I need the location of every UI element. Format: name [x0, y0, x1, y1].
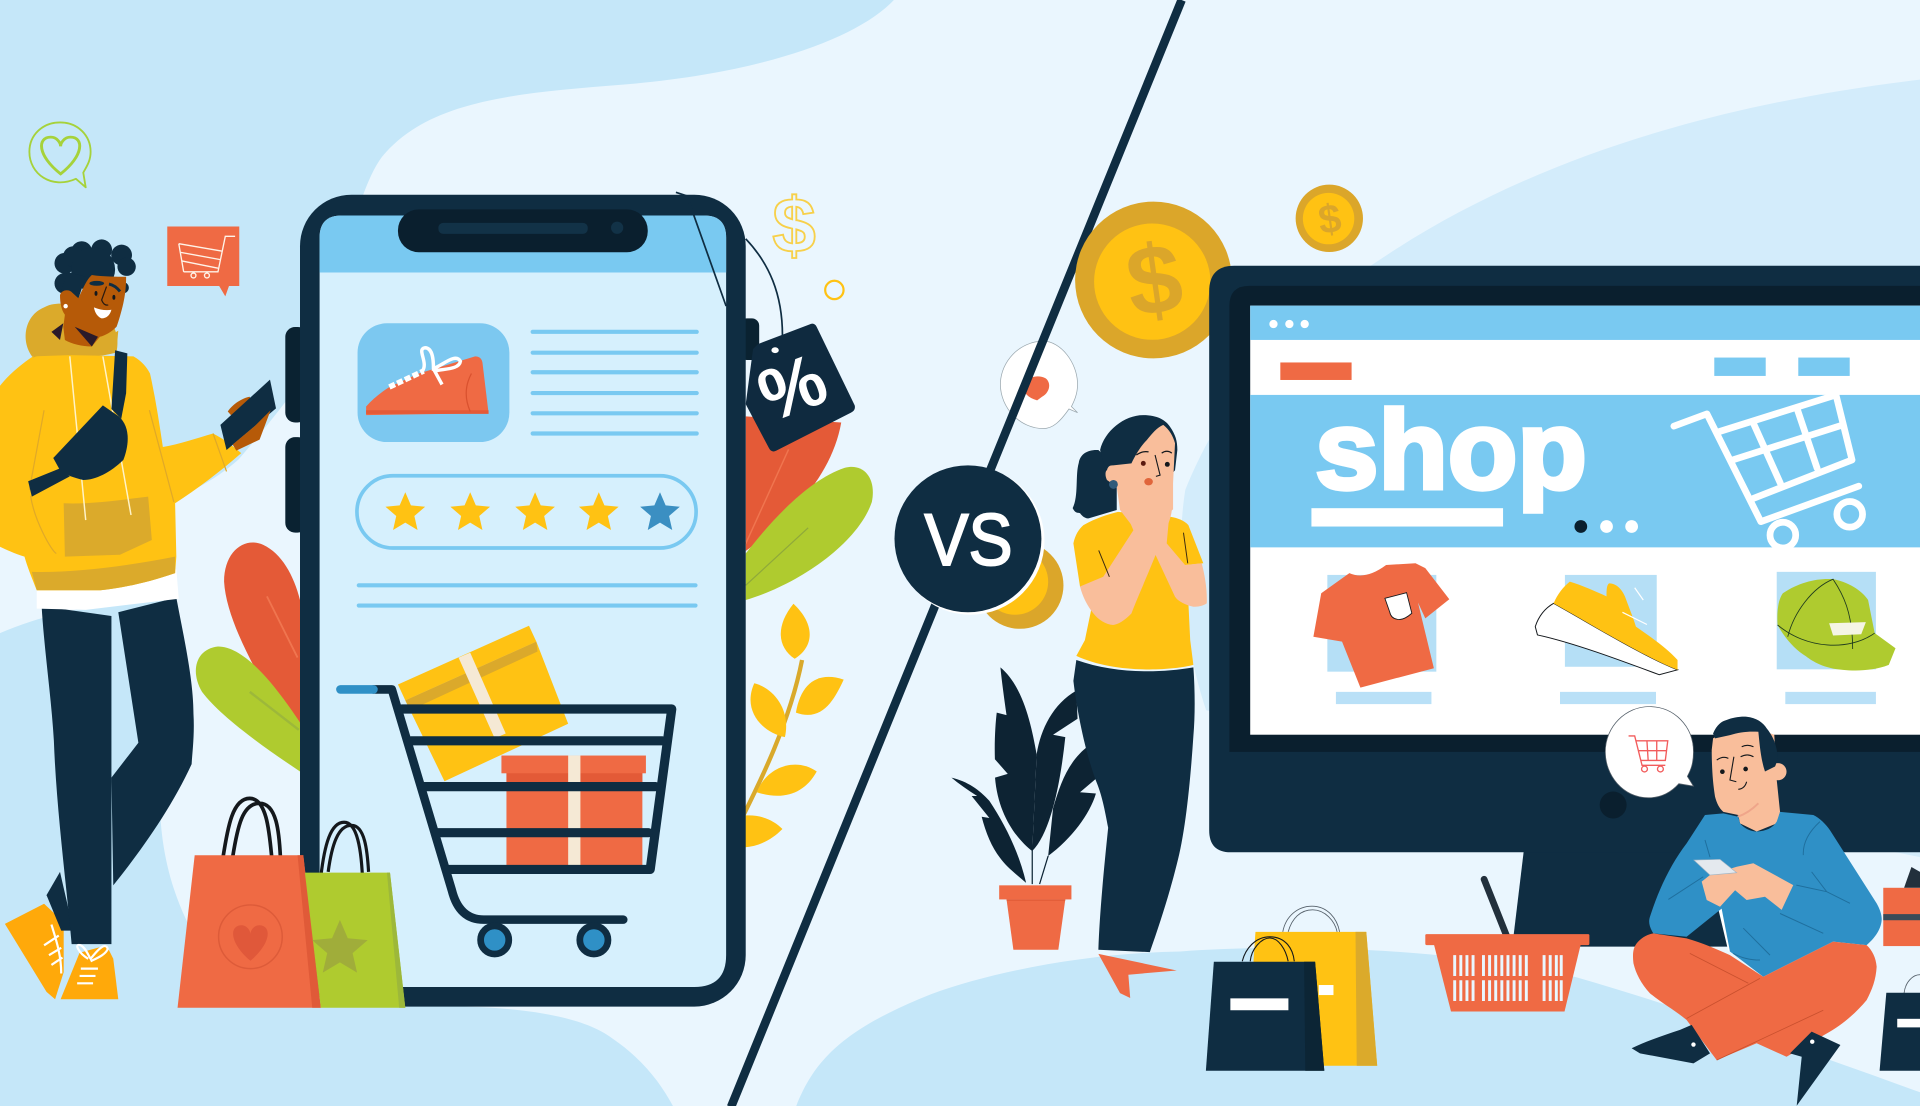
yellow gift box — [398, 626, 568, 781]
hair — [54, 239, 136, 299]
coins — [977, 185, 1363, 629]
VS badge: VS — [924, 498, 1013, 581]
small ring — [825, 281, 844, 299]
man back leg and shoe — [5, 598, 194, 999]
product card with shoe — [358, 323, 509, 442]
navy bag at right edge — [1880, 975, 1920, 1071]
monitor bezel — [1229, 286, 1920, 752]
man hand and phone — [220, 380, 276, 451]
woman's heart bubble — [1000, 341, 1078, 429]
price tag: % — [747, 337, 838, 438]
small coin — [1296, 185, 1363, 252]
phone screen — [320, 216, 726, 987]
woman head — [1100, 415, 1177, 527]
left leaves behind phone — [196, 543, 300, 771]
product: t-shirt — [1313, 563, 1449, 688]
shopping bags left — [178, 798, 405, 1008]
browser window — [1250, 306, 1920, 735]
price tag — [676, 192, 855, 451]
woman arms and hands — [1080, 483, 1207, 625]
coin behind VS — [977, 542, 1063, 629]
seated man shoes — [1632, 1025, 1840, 1106]
plant leaves — [951, 667, 1096, 883]
review lines — [359, 585, 696, 606]
shop heading: shop — [1315, 387, 1587, 512]
monitor stand — [1512, 845, 1739, 947]
description lines — [533, 332, 697, 433]
woman — [1073, 415, 1207, 998]
head — [51, 239, 136, 347]
fanny pack — [28, 350, 128, 497]
white strip under arm — [1720, 908, 1730, 950]
yellow bag — [1247, 906, 1377, 1066]
woman shirt — [1073, 512, 1203, 669]
icon: heart speech bubble — [29, 122, 91, 187]
icon: cart speech bubble — [167, 227, 239, 296]
monitor body — [1209, 266, 1920, 852]
woman hair back — [1073, 450, 1117, 518]
product captions — [1336, 692, 1876, 704]
right leaves behind phone — [746, 416, 873, 600]
green bag — [305, 822, 405, 1008]
shirt folds — [1668, 822, 1850, 960]
product: sneaker — [1535, 575, 1678, 675]
plant pot — [999, 885, 1071, 950]
woman trousers — [1073, 660, 1195, 952]
cart wheels — [481, 926, 608, 954]
rating pill — [357, 476, 696, 548]
big coin — [1075, 202, 1232, 358]
man front shoe — [61, 945, 118, 999]
monitor — [1209, 266, 1920, 947]
seated man — [1605, 707, 1882, 1106]
orange trousers — [1633, 933, 1877, 1060]
phone — [285, 195, 759, 1007]
white shirt hem — [37, 569, 179, 610]
diagonal divider, upper part behind VS — [731, 0, 1182, 1106]
phone body — [300, 195, 746, 1007]
hero banner — [1250, 387, 1920, 548]
phone notch — [398, 209, 648, 252]
yellow branch — [742, 604, 844, 847]
potted plant — [951, 667, 1096, 950]
VS badge — [894, 465, 1044, 615]
monitor power button — [1600, 792, 1627, 818]
small coin: $ — [1315, 194, 1344, 243]
shopping cart — [340, 689, 672, 920]
hood inner — [33, 331, 118, 358]
basket — [1425, 879, 1589, 1011]
hood — [26, 304, 117, 359]
icon: dollar outline: $ — [772, 181, 816, 269]
man with phone — [0, 239, 276, 999]
speech bubble with cart — [1605, 707, 1693, 798]
woman shoes — [1098, 954, 1177, 998]
navy bag — [1206, 937, 1324, 1071]
man front leg — [42, 606, 111, 944]
orange gift box — [501, 756, 646, 865]
shopping bags right — [1206, 906, 1377, 1071]
cart outline — [1674, 395, 1863, 548]
seated man head — [1712, 717, 1787, 831]
phone side buttons — [285, 318, 759, 533]
seated man shirt — [1649, 812, 1882, 977]
divider line — [731, 0, 1182, 1106]
yellow hoodie — [0, 355, 241, 590]
phone header — [320, 216, 726, 272]
big coin: $ — [1120, 221, 1189, 338]
product: cap — [1777, 572, 1896, 670]
gift at right edge — [1883, 867, 1920, 946]
orange bag — [178, 798, 321, 1008]
hands and phone — [1694, 859, 1793, 910]
